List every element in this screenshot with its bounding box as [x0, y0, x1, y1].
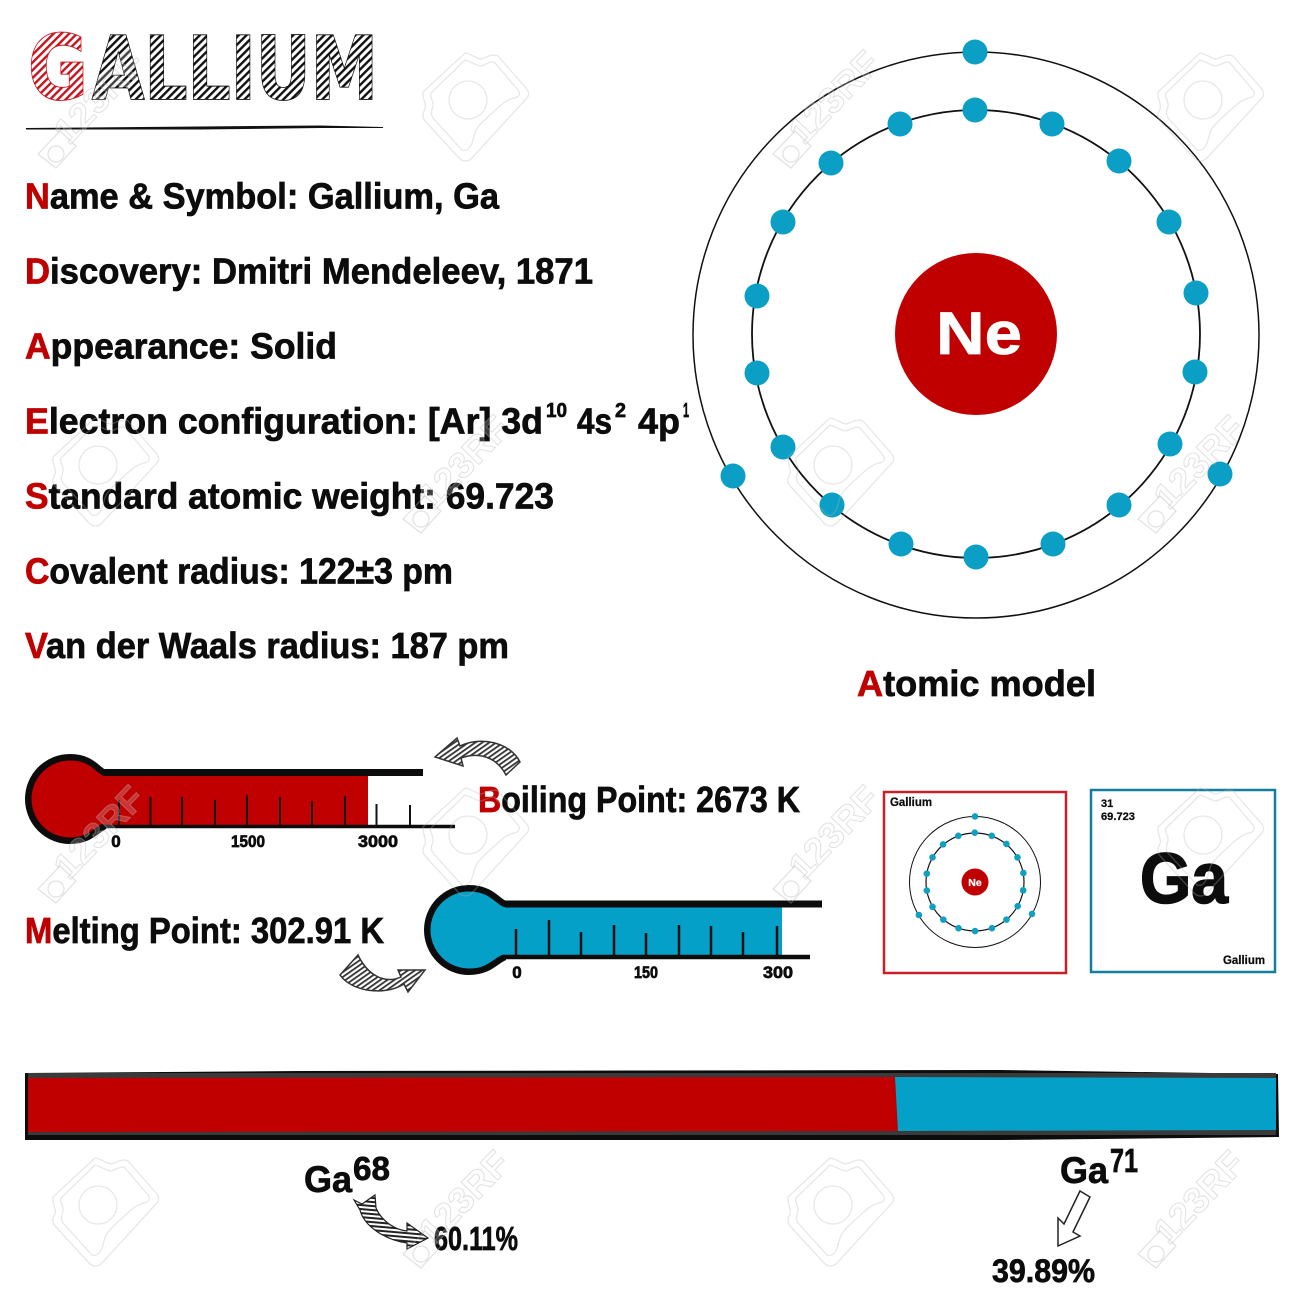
fact: van der Waals radius: Van der Waals radius: 187 pm	[25, 625, 509, 666]
fact: electron configuration: Electron configuration: [Ar] 3d	[25, 400, 543, 442]
card: mini atomic model	[884, 792, 1066, 973]
isotope label: Ga71: 71	[1110, 1142, 1138, 1179]
melting point arrow	[340, 955, 425, 992]
isotope label: Ga68: Ga	[304, 1159, 352, 1200]
card: periodic table entry	[1091, 790, 1275, 972]
scale labels: 150	[634, 963, 658, 982]
nucleus	[895, 253, 1057, 415]
title: Gallium	[28, 16, 378, 120]
melting point thermometer	[427, 888, 822, 982]
segment: Ga71	[895, 1077, 1276, 1131]
element facts list	[25, 176, 689, 666]
boiling point arrow	[435, 738, 520, 775]
scale labels: 1500	[231, 832, 265, 851]
scale labels	[111, 832, 398, 851]
atomic number and weight: 31	[1101, 798, 1113, 810]
element symbol: Ga	[1140, 840, 1228, 919]
fact: electron configuration: 10	[546, 400, 567, 422]
isotope share: 39.89%: 39.89%	[992, 1253, 1095, 1289]
title: Gallium: ALLIUM	[92, 18, 378, 120]
card: mini atomic model: Ne	[968, 877, 982, 889]
fact: standard atomic weight: Standard atomic weight: 69.723	[25, 476, 554, 516]
fact: electron configuration: 4s	[577, 400, 612, 442]
caption: atomic model: Atomic model	[857, 663, 1096, 704]
element name: Gallium	[1223, 953, 1265, 967]
fact: electron configuration: 4p	[638, 400, 680, 442]
isotope abundance bar	[25, 1070, 1279, 1140]
scale labels: 3000	[358, 832, 398, 851]
arrow: Ga68 to percentage	[354, 1195, 428, 1249]
scale labels: 0	[111, 832, 121, 851]
arrow: Ga71 to percentage	[1058, 1191, 1090, 1246]
fact: discovery: Discovery: Dmitri Mendeleev, 1871	[25, 250, 593, 292]
isotope share: 60.11%: 60.11%	[434, 1220, 518, 1257]
boiling point thermometer	[28, 757, 455, 851]
segment: Ga68	[28, 1077, 898, 1132]
scale labels: 0	[512, 963, 522, 982]
fact: electron configuration: 2	[615, 400, 626, 422]
atomic number and weight: 69.723	[1101, 811, 1135, 823]
melting point label: Melting Point: 302.91 K	[25, 910, 384, 951]
atomic model diagram	[693, 40, 1259, 618]
isotope label: Ga71	[1060, 1142, 1138, 1191]
fact: electron configuration: 1	[683, 400, 689, 422]
title: Gallium: G	[28, 16, 88, 120]
electrons	[720, 40, 1232, 570]
atomic number and weight	[1101, 798, 1135, 823]
fact: appearance: Appearance: Solid	[25, 326, 337, 366]
card heading: Gallium	[890, 795, 932, 809]
nucleus: Ne	[936, 300, 1022, 367]
isotope label: Ga68: 68	[353, 1150, 390, 1187]
fact: name and symbol: Name & Symbol: Gallium, Ga	[25, 176, 500, 216]
isotope label: Ga68	[304, 1150, 390, 1200]
mini electrons	[916, 813, 1035, 934]
fact: covalent radius: Covalent radius: 122±3 pm	[25, 550, 453, 592]
title underline	[26, 126, 383, 130]
scale labels: 300	[763, 963, 793, 982]
isotope label: Ga71: Ga	[1060, 1150, 1108, 1191]
scale labels	[512, 963, 793, 982]
boiling point label: Boiling Point: 2673 K	[478, 779, 800, 820]
